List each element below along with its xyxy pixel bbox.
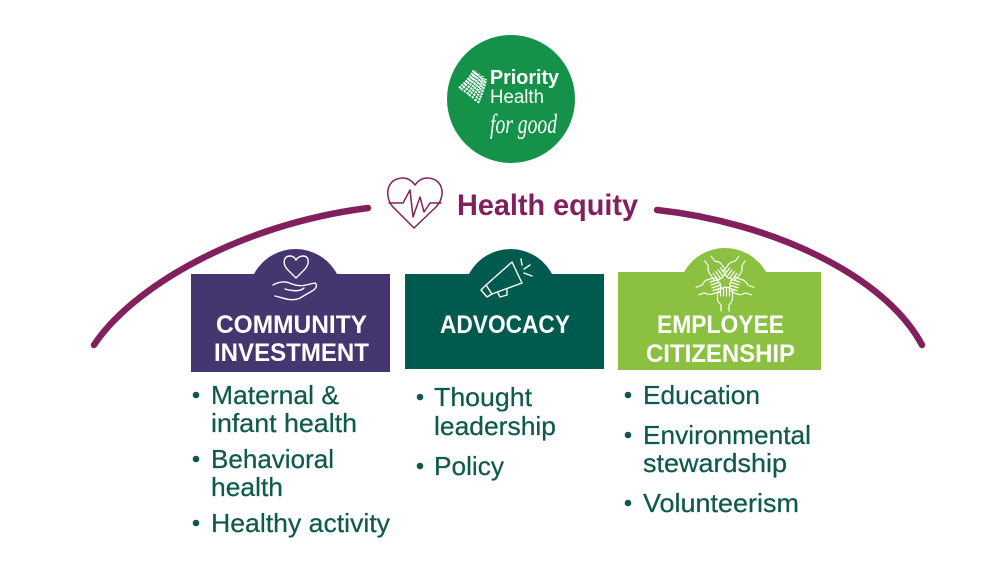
icon: hand holding heart (273, 256, 316, 300)
panel: community investment: INVESTMENT (214, 339, 369, 367)
list: employee citizenship: stewardship (643, 448, 787, 478)
panel: community investment (191, 249, 390, 372)
list: community investment (193, 380, 390, 538)
list: employee citizenship: Environmental (643, 420, 811, 450)
arc: left (94, 208, 368, 345)
list: community investment: Maternal & (211, 380, 339, 410)
icon: megaphone (481, 259, 532, 297)
heading: Health equity: Health equity (457, 189, 638, 222)
list: community investment: Behavioral (211, 444, 334, 474)
panel: advocacy (405, 249, 604, 369)
logo text: Priority: Priority (490, 67, 560, 89)
icon: dotted logo mark (459, 70, 486, 103)
list: employee citizenship: Volunteerism (643, 488, 799, 518)
heading: Community Investment: COMMUNITY (216, 311, 367, 339)
list: advocacy (417, 382, 556, 481)
panel: employee citizenship (618, 248, 821, 370)
logo text: Health: Health (490, 87, 544, 108)
panel: employee citizenship: CITIZENSHIP (646, 340, 795, 368)
logo: Priority Health for good (447, 35, 575, 163)
heading: Employee Citizenship: EMPLOYEE (657, 311, 784, 339)
list: employee citizenship (625, 380, 811, 518)
icon: heart with pulse (388, 178, 442, 228)
heading: Advocacy: ADVOCACY (440, 311, 570, 339)
list: community investment: infant health (211, 408, 357, 438)
icon: hands in a circle (695, 254, 755, 311)
list: community investment: Healthy activity (211, 508, 390, 538)
list: advocacy: Thought (434, 382, 533, 412)
arc: right (657, 210, 922, 345)
list: advocacy: Policy (434, 451, 504, 481)
list: community investment: health (211, 472, 283, 502)
logo text: for good: for good (490, 109, 557, 139)
list: advocacy: leadership (434, 411, 556, 441)
list: employee citizenship: Education (643, 380, 760, 410)
